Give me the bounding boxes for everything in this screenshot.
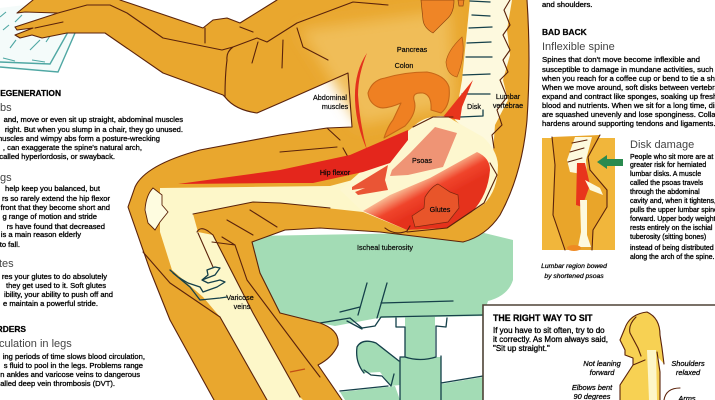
left column text: ing periods of time slows blood circulation, [3,352,145,361]
anatomy labels: Ischeal tuberosity [357,243,413,252]
anatomy labels: Psoas [412,156,432,165]
posture labels: Elbows bent [572,383,613,392]
left column text: s fluid to pool in the legs. Problems range [4,361,143,370]
left column text: and, move or even sit up straight, abdominal muscles [4,115,183,124]
anatomy labels: muscles [322,102,349,111]
left column text [0,88,183,388]
keyboard [0,0,75,72]
anatomy labels [226,45,523,311]
right column: bad back text [541,0,715,128]
disk damage text: along the arch of the spine. [630,254,715,261]
anatomy labels: Varicose [226,293,254,302]
body silhouette [15,0,529,400]
left column text: help keep you balanced, but [5,184,101,193]
glute muscle [363,152,490,230]
disk damage text: instead of being distributed [630,245,714,252]
left column text: n ankles and varicose veins to dangerous [0,370,140,379]
left column text: ibility, your ability to push off and [4,290,113,299]
left column text: right. But when you slump in a chair, they go unused. [5,125,183,134]
right column: bad back text: BAD BACK [542,27,587,37]
posture labels: relaxed [676,368,701,377]
panel intro text: If you have to sit often, try to do [493,326,605,335]
right column: bad back text: Inflexible spine [542,41,615,53]
left column text: g range of motion and stride [2,212,97,221]
left column text: called hyperlordosis, or swayback. [0,152,115,161]
disk damage text: called the psoas travels [630,180,704,187]
anatomy labels: vertebrae [493,101,523,110]
disk damage text: through the abdominal [630,189,700,196]
left column text: rs so rarely extend the hip flexor [2,194,110,203]
posture labels [572,359,705,400]
left column text: bs [0,102,12,114]
anatomy labels: veins [234,302,251,311]
left column text: gs [0,172,12,184]
left column text: to fall. [0,240,20,249]
left column text: is a main reason elderly [1,230,81,239]
disk damage text: cavity and, when it tightens, [630,198,715,205]
pelvis outline [385,117,497,233]
left column text: e maintain a powerful stride. [3,299,98,308]
inset: lumbar region illustration [542,135,615,251]
anatomy labels: Abdominal [313,93,347,102]
icon: seated woman [620,312,680,400]
panel intro text [493,326,608,353]
panel heading: THE RIGHT WAY TO SIT [493,313,593,323]
panel intro text: "Sit up straight." [493,344,550,353]
hip flexor [178,130,408,184]
femur and tibia bones [143,170,410,400]
left column text: culation in legs [0,338,72,350]
right column: bad back text: and shoulders. [542,0,592,9]
anatomy labels: Glutes [430,205,451,214]
right column: bad back text: hardens around supporting tendons and ligaments. [542,119,715,128]
icon: varicose veins [170,267,227,300]
panel intro text: it correctly. As Mom always said, [493,335,608,344]
anatomy labels: Colon [395,61,413,70]
right column: bad back text: expand and contract like sponges, soaking up fresh [542,92,715,101]
panel: the right way to sit [483,305,715,400]
posture labels: Not leaning [583,359,622,368]
anatomy labels: Hip flexor [320,168,351,177]
left column text: they get used to it. Soft glutes [6,281,106,290]
anatomy labels: Lumbar [496,92,521,101]
pelvis [340,116,498,230]
right column: bad back text: Spines that don't move become inflexible and [542,55,700,64]
left column text: res your glutes to do absolutely [2,272,107,281]
body outlines [15,0,529,400]
left column text: front that they become short and [1,203,110,212]
gluteus patch [412,184,459,227]
chair [250,232,513,400]
left column text: muscles and wimpy abs form a posture-wrecking [0,134,160,143]
posture labels: forward [590,368,615,377]
disk damage text: greater risk for herniated [630,162,706,169]
posture labels: Shoulders [671,359,705,368]
minor muscle fibres [352,165,388,195]
disk damage text: tuberosity (sitting bones) [630,234,706,241]
left column text: , can exaggerate the spine's natural arch, [3,143,142,152]
kneecap [145,188,168,230]
organs [368,0,464,138]
disk damage text: People who sit more are at [630,154,713,161]
disk damage text: rests entirely on the ischial [630,225,713,232]
anatomy labels: Disk [467,102,481,111]
torso lighter tone [300,10,455,125]
disk damage text: forward. Upper body weight [630,216,715,223]
left column text: rs have found that decreased [7,222,105,231]
disk damage text [630,139,715,261]
arrow: green [597,155,623,169]
bone and fold lines [143,202,330,400]
disk damage text: lumbar disks. A muscle [630,171,701,178]
inset caption [541,263,607,280]
spine and vertebrae [455,0,512,153]
psoas [390,127,457,176]
disk damage text: Disk damage [630,139,694,151]
muscles [178,53,498,233]
inset caption: by shortened psoas [544,273,604,280]
anatomy labels: Pancreas [397,45,428,54]
inset caption: Lumbar region bowed [541,263,607,270]
